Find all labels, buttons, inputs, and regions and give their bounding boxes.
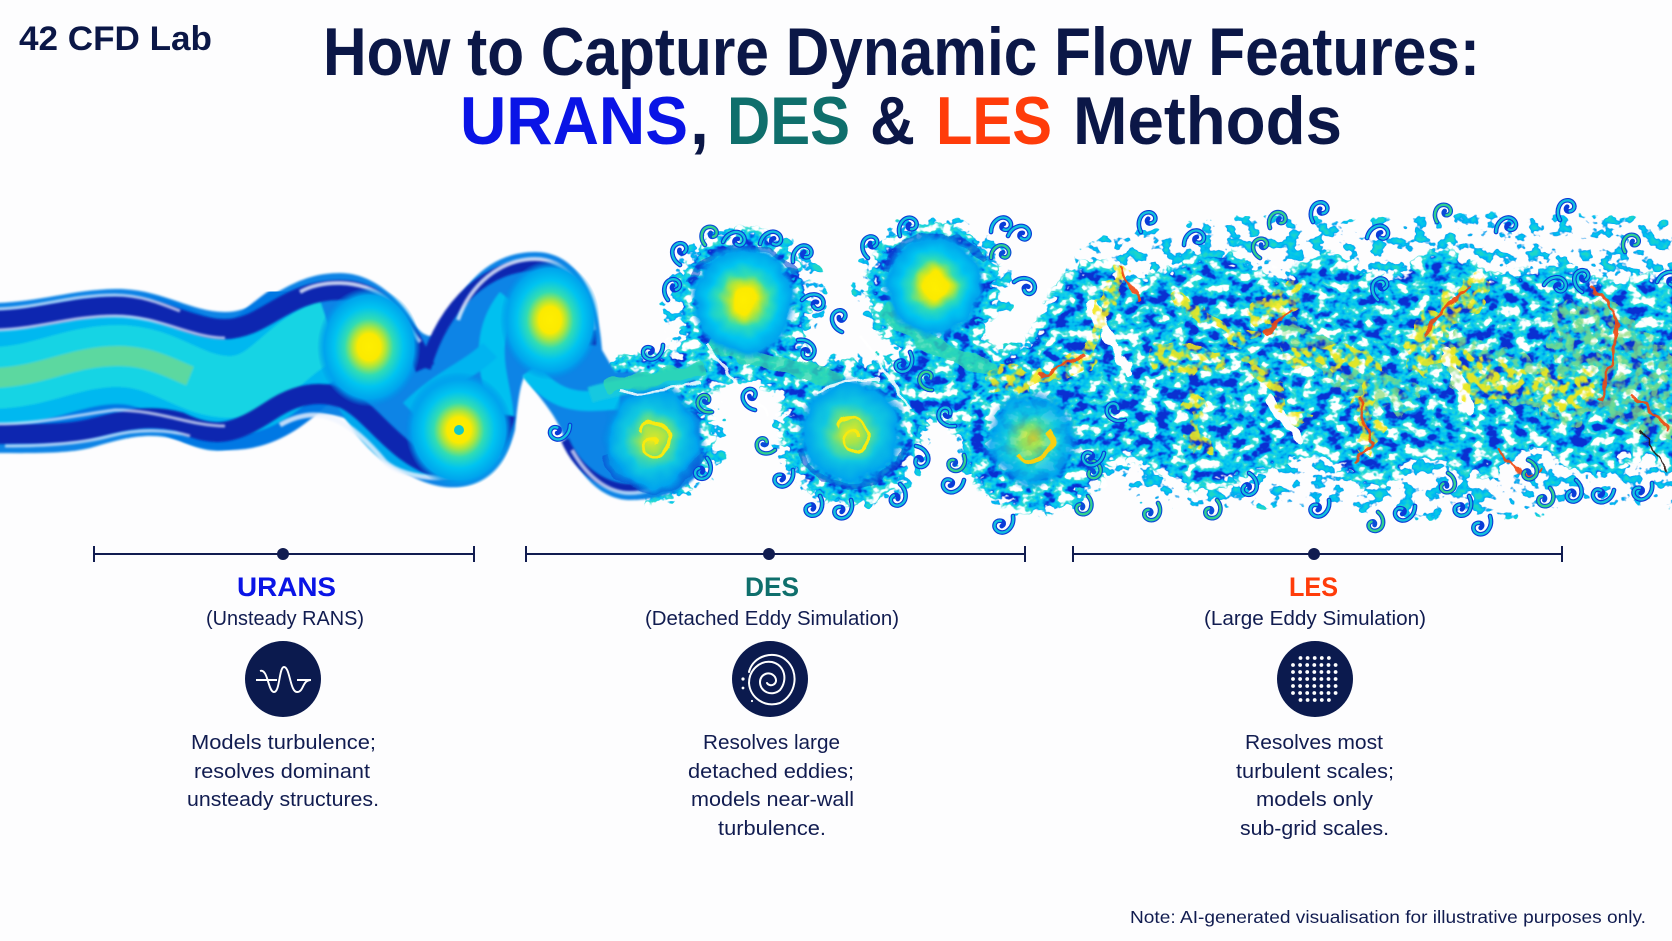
title: DES: [727, 83, 850, 159]
description: Models turbulence;: [191, 731, 376, 754]
URANS laminar band and vortices: [0, 252, 700, 500]
title: &: [870, 83, 915, 159]
band core colour layers: [0, 300, 700, 468]
vortex 5: [690, 243, 798, 359]
connecting strips: [610, 312, 990, 385]
icon: wave: [245, 641, 321, 717]
subheading: (Large Eddy Simulation): [1204, 607, 1426, 630]
description: detached eddies;: [688, 760, 854, 783]
description: sub-grid scales.: [1240, 817, 1389, 840]
icon: dot grid: [1277, 641, 1353, 717]
yellow ribbons: [991, 273, 1580, 450]
band silhouette: [0, 252, 700, 500]
DES vortices: [601, 232, 1080, 495]
title: [323, 14, 1480, 159]
vortex 8: [984, 390, 1080, 490]
vortex 3: [500, 260, 600, 380]
panel: DES: [526, 546, 1025, 840]
range bracket: [526, 546, 1025, 562]
description: turbulence.: [718, 817, 826, 840]
description: [1236, 731, 1394, 840]
turbulent base region: DES to LES: [593, 224, 1672, 512]
heading: LES: [1289, 572, 1338, 602]
title: LES: [936, 83, 1052, 159]
title: URANS: [460, 83, 688, 159]
subheading: (Unsteady RANS): [206, 607, 364, 630]
heading: URANS: [237, 572, 336, 602]
title: ,: [690, 83, 709, 159]
wake streaks: [620, 335, 910, 415]
description: models only: [1256, 788, 1374, 811]
vortex rings: [605, 236, 985, 489]
red veins: [1040, 270, 1668, 474]
panel: LES: [1073, 546, 1562, 840]
vortex 7: [882, 232, 986, 340]
description: Resolves most: [1245, 731, 1383, 754]
flow visualisation: [0, 199, 1672, 534]
icon: spiral: [732, 641, 808, 717]
brand label: 42 CFD Lab: [19, 20, 212, 58]
vortex 6: [795, 376, 907, 488]
pale streak highlights: [0, 259, 688, 493]
dark streaks: [0, 265, 690, 488]
panel: URANS: [94, 546, 474, 811]
title: Methods: [1073, 83, 1342, 159]
description: unsteady structures.: [187, 788, 379, 811]
vortex 4: [601, 383, 705, 495]
detached curl fragments: [548, 199, 1672, 534]
green overlay: [1290, 340, 1660, 400]
description: resolves dominant: [194, 760, 370, 783]
description: models near-wall: [691, 788, 854, 811]
heading: DES: [745, 572, 799, 602]
description: turbulent scales;: [1236, 760, 1394, 783]
footnote: Note: AI-generated visualisation for illustrative purposes only.: [1130, 907, 1646, 927]
vortex 1: [317, 287, 421, 407]
vortex 2: [405, 372, 513, 488]
range bracket: [94, 546, 474, 562]
description: Resolves large: [703, 731, 840, 754]
description: [187, 731, 379, 811]
white tears in the LES region: [1092, 305, 1470, 440]
sparse fragment fringe: [586, 206, 1672, 526]
green overlay and yellow ribbons: [991, 273, 1660, 450]
range bracket: [1073, 546, 1562, 562]
title: How to Capture Dynamic Flow Features:: [323, 14, 1480, 90]
description: [688, 731, 854, 840]
subheading: (Detached Eddy Simulation): [645, 607, 899, 630]
